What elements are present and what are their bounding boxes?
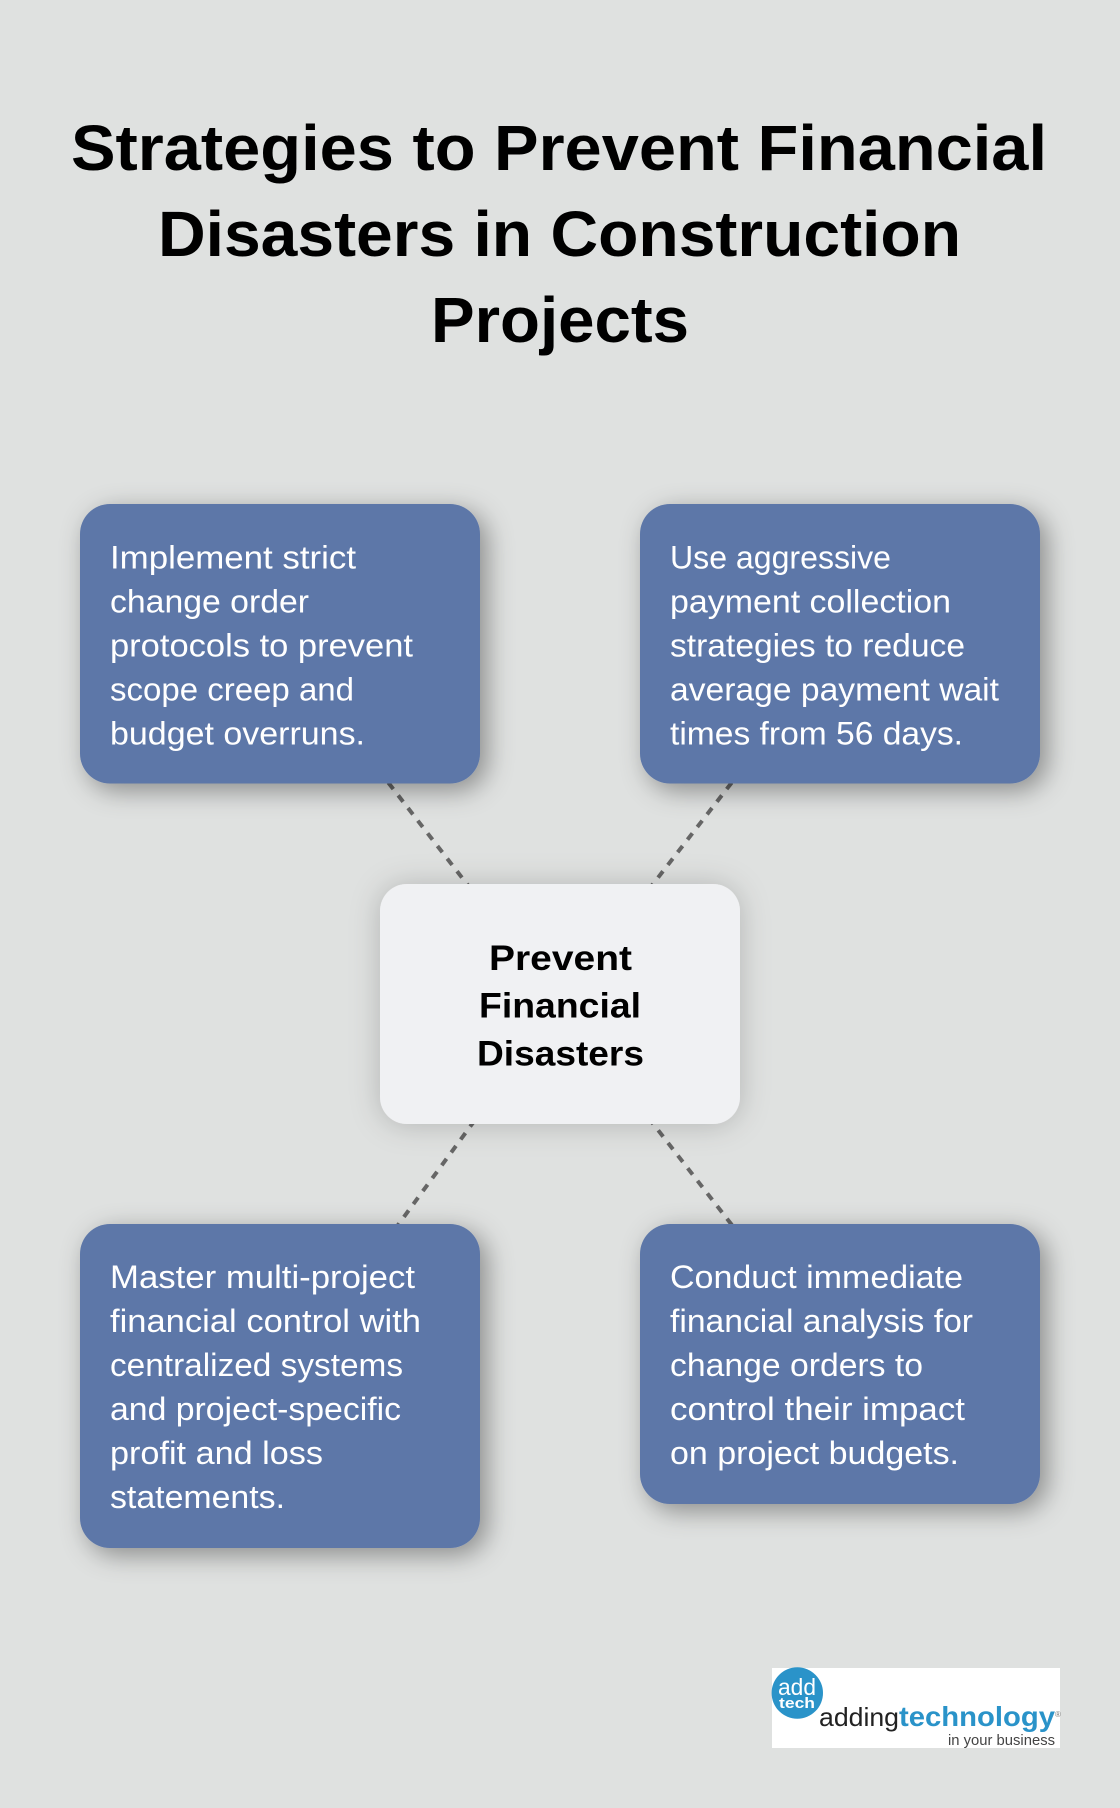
panel: payment collection: strategies to reduce (670, 627, 965, 663)
panel: change order protocols: change order (110, 583, 309, 619)
panel: change order analysis: change orders to (670, 1347, 923, 1383)
panel: change order analysis: on project budgets. (670, 1435, 959, 1471)
panel: multi-project control: and project-specific (110, 1391, 401, 1427)
panel: multi-project control: profit and loss (110, 1435, 323, 1471)
panel: change order analysis (640, 1224, 1040, 1504)
panel: payment collection (640, 504, 1040, 784)
panel: central node: Financial (479, 986, 641, 1026)
logo: adding technology: tech (779, 1695, 815, 1712)
panel: central node: Prevent (489, 938, 632, 978)
logo: adding technology: adding (819, 1702, 899, 1732)
panel: central node (380, 884, 740, 1124)
logo: adding technology: ® (1055, 1710, 1061, 1719)
panel: multi-project control: Master multi-project (110, 1259, 415, 1295)
panel: multi-project control: centralized systems (110, 1347, 403, 1383)
logo: adding technology: add (778, 1674, 816, 1700)
panel: change order protocols (80, 504, 480, 784)
panel: change order protocols: Implement strict (110, 539, 356, 575)
title: Disasters in Construction (158, 198, 961, 270)
logo: adding technology: technology (899, 1701, 1055, 1732)
panel: change order protocols: scope creep and (110, 671, 354, 707)
title (71, 112, 1047, 356)
panel: change order protocols: protocols to prevent (110, 627, 413, 663)
panel: multi-project control: statements. (110, 1479, 285, 1515)
title: Projects (431, 284, 689, 356)
panel: payment collection: times from 56 days. (670, 715, 963, 751)
panel: multi-project control (80, 1224, 480, 1548)
panel: payment collection: payment collection (670, 583, 951, 619)
panel: central node: Disasters (477, 1034, 644, 1074)
panel: payment collection: average payment wait (670, 671, 999, 707)
title: Strategies to Prevent Financial (71, 112, 1047, 184)
logo: adding technology: in your business (948, 1733, 1055, 1749)
panel: multi-project control: financial control with (110, 1303, 421, 1339)
panel: change order analysis: financial analysis for (670, 1303, 973, 1339)
panel: change order analysis: Conduct immediate (670, 1259, 963, 1295)
logo: adding technology (772, 1667, 1061, 1749)
panel: change order protocols: budget overruns. (110, 715, 365, 751)
panel: payment collection: Use aggressive (670, 539, 891, 575)
panel: change order analysis: control their impact (670, 1391, 965, 1427)
dotted connectors (280, 643, 840, 1386)
